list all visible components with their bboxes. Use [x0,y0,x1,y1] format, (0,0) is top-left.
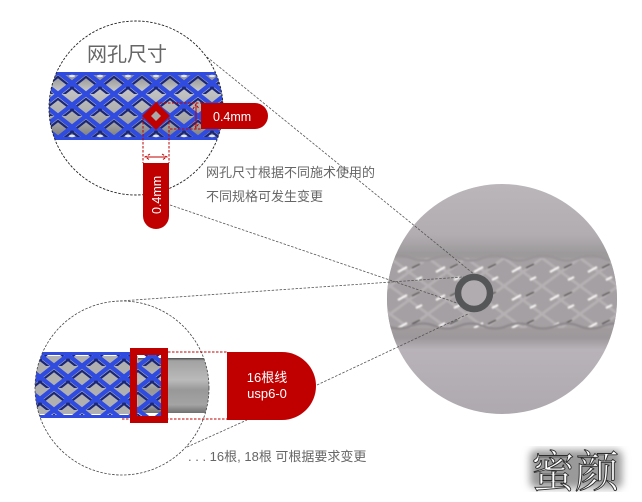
strand count label: 16根线 [247,370,287,385]
dashed guides to label [122,352,227,419]
strand count label: usp6-0 [247,386,287,401]
dashed magnifier circle [49,21,223,195]
horizontal label pill [201,103,268,129]
panel: strand count detail [30,301,316,475]
dashed magnifier circle [35,301,209,475]
heading: 网孔尺寸 [87,43,167,66]
dimension guides [143,103,201,163]
strand count note: . . . 16根, 18根 可根据要求变更 [188,449,366,464]
vertical label pill: 0.4mm [150,176,164,214]
strand count label [227,352,316,420]
aperture description text: 不同规格可发生变更 [206,189,323,204]
aperture description text [206,165,375,204]
mesh tube illustration [48,72,224,140]
aperture description text: 网孔尺寸根据不同施术使用的 [206,165,375,180]
vertical label pill [143,163,169,229]
horizontal label pill: 0.4mm [213,110,251,124]
mesh and core tube illustration [30,352,212,418]
red highlight frame [134,352,164,420]
connector lines from detail circles to the photo [120,57,477,447]
panel: mesh aperture detail [48,21,268,229]
photo circle: braided mesh close-up [387,184,627,414]
highlighted mesh opening [142,102,170,130]
watermark: 蜜颜 [531,436,620,500]
photo focus ring [458,277,490,309]
